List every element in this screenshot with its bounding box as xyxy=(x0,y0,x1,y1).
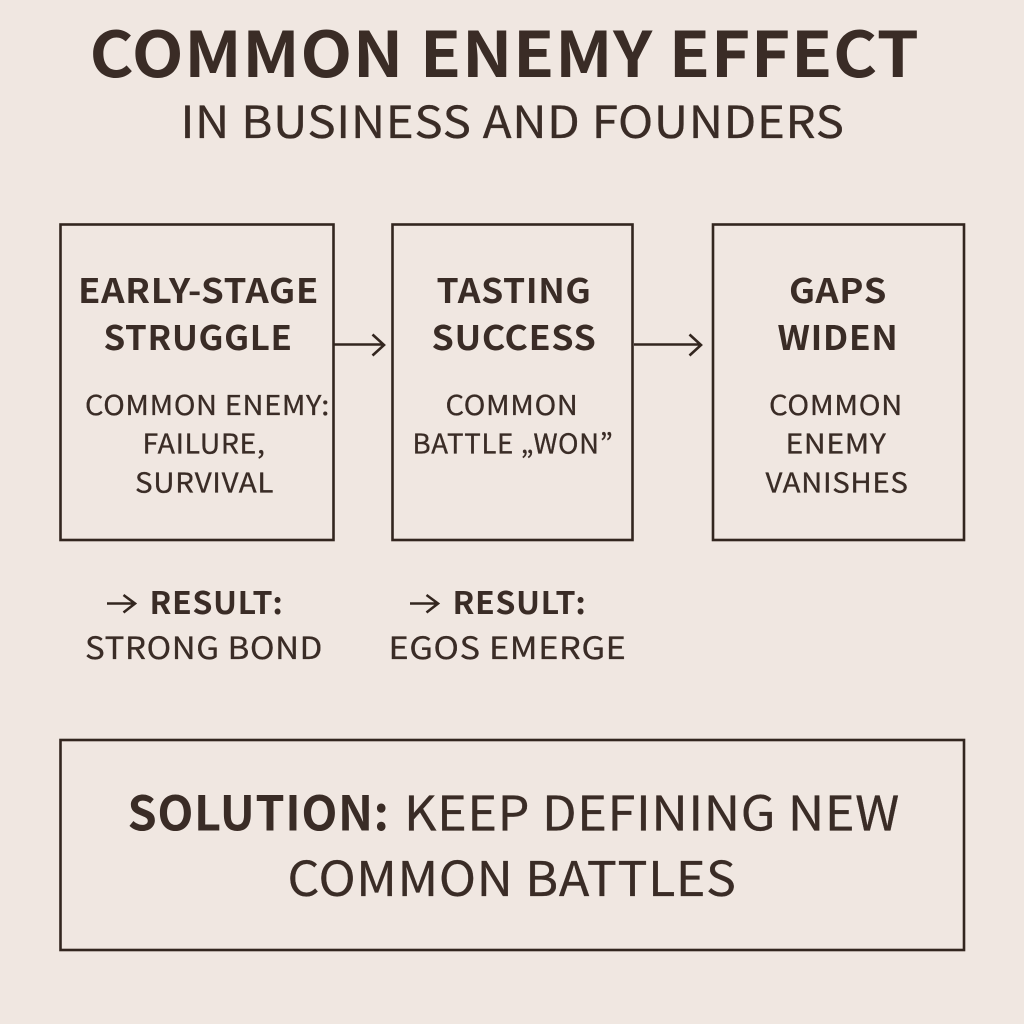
panel: tasting success: BATTLE „WON” xyxy=(412,422,614,462)
result: strong bond: RESULT: xyxy=(150,578,284,623)
panel: gaps widen: ENEMY xyxy=(786,422,886,462)
panel: gaps widen: WIDEN xyxy=(778,311,898,360)
panel: tasting success: TASTING xyxy=(436,264,592,313)
panel: gaps widen xyxy=(713,224,964,540)
panel: gaps widen: COMMON xyxy=(769,383,903,423)
title: COMMON ENEMY EFFECT xyxy=(90,5,920,96)
panel: gaps widen: VANISHES xyxy=(766,460,908,500)
arrow: struggle to success xyxy=(334,334,384,356)
panel: solution: COMMON BATTLES xyxy=(288,840,736,910)
arrow: success to gaps xyxy=(634,334,701,356)
result: egos emerge xyxy=(388,578,626,668)
panel: gaps widen: GAPS xyxy=(789,264,887,313)
panel: tasting success xyxy=(392,224,632,540)
panel: solution: KEEP DEFINING NEW xyxy=(404,774,900,844)
panel: early-stage struggle: STRUGGLE xyxy=(104,311,292,360)
panel: tasting success: SUCCESS xyxy=(432,311,596,360)
result: egos emerge: RESULT: xyxy=(452,578,586,623)
panel: early-stage struggle: FAILURE, xyxy=(142,422,266,462)
result: egos emerge: EGOS EMERGE xyxy=(388,623,626,668)
result: strong bond: STRONG BOND xyxy=(85,623,323,668)
panel: early-stage struggle: SURVIVAL xyxy=(135,460,274,500)
result: strong bond xyxy=(85,578,323,668)
panel: tasting success: COMMON xyxy=(446,383,578,423)
panel: early-stage struggle: EARLY-STAGE xyxy=(78,264,319,313)
panel: solution xyxy=(60,740,964,950)
subtitle: IN BUSINESS AND FOUNDERS xyxy=(180,87,845,151)
panel: early-stage struggle: COMMON ENEMY: xyxy=(85,383,330,423)
panel: solution: SOLUTION: xyxy=(128,774,390,844)
panel: early-stage struggle xyxy=(60,224,334,540)
